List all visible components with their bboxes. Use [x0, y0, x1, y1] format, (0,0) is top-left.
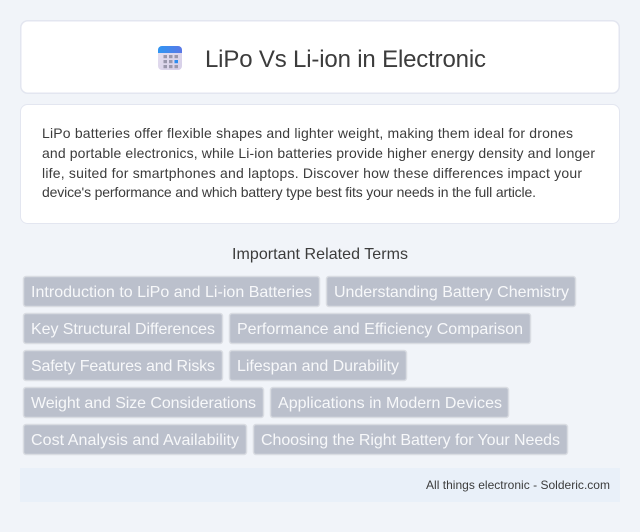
tags list	[24, 276, 576, 454]
description text: life, suited for smartphones and laptops. Discover how these differences impact your	[42, 165, 582, 181]
tag	[326, 276, 576, 306]
tag: Performance and Efficiency Comparison	[237, 321, 523, 338]
heading: related terms: Important Related Terms	[232, 246, 408, 263]
panel: description	[20, 104, 620, 224]
tag	[24, 388, 264, 418]
description text: and portable electronics, while Li-ion batteries provide higher energy density and longer	[42, 145, 595, 161]
footer text: All things electronic - Solderic.com	[426, 478, 610, 492]
tag: Safety Features and Risks	[31, 358, 215, 375]
icon: calendar	[158, 46, 182, 70]
title: LiPo Vs Li-ion in Electronic	[205, 46, 486, 73]
tag: Key Structural Differences	[31, 321, 215, 338]
footer	[20, 468, 620, 502]
description text: LiPo batteries offer flexible shapes and lighter weight, making them ideal for drones	[42, 125, 573, 141]
tag	[24, 424, 246, 454]
description text: device's performance and which battery type best fits your needs in the full article.	[42, 184, 536, 200]
tag: Lifespan and Durability	[237, 358, 399, 375]
description text	[42, 125, 595, 200]
tag	[24, 314, 222, 344]
tag	[230, 314, 530, 344]
tag: Applications in Modern Devices	[278, 395, 502, 412]
tag: Understanding Battery Chemistry	[334, 284, 569, 301]
tag: Choosing the Right Battery for Your Needs	[261, 432, 560, 449]
tag	[24, 350, 222, 380]
tag	[230, 350, 406, 380]
tag	[270, 388, 508, 418]
tag: Cost Analysis and Availability	[31, 432, 239, 449]
tag	[24, 276, 320, 306]
tag: Introduction to LiPo and Li-ion Batteries	[31, 284, 312, 301]
tag: Weight and Size Considerations	[31, 395, 256, 412]
tag	[254, 424, 568, 454]
header card	[21, 21, 619, 93]
